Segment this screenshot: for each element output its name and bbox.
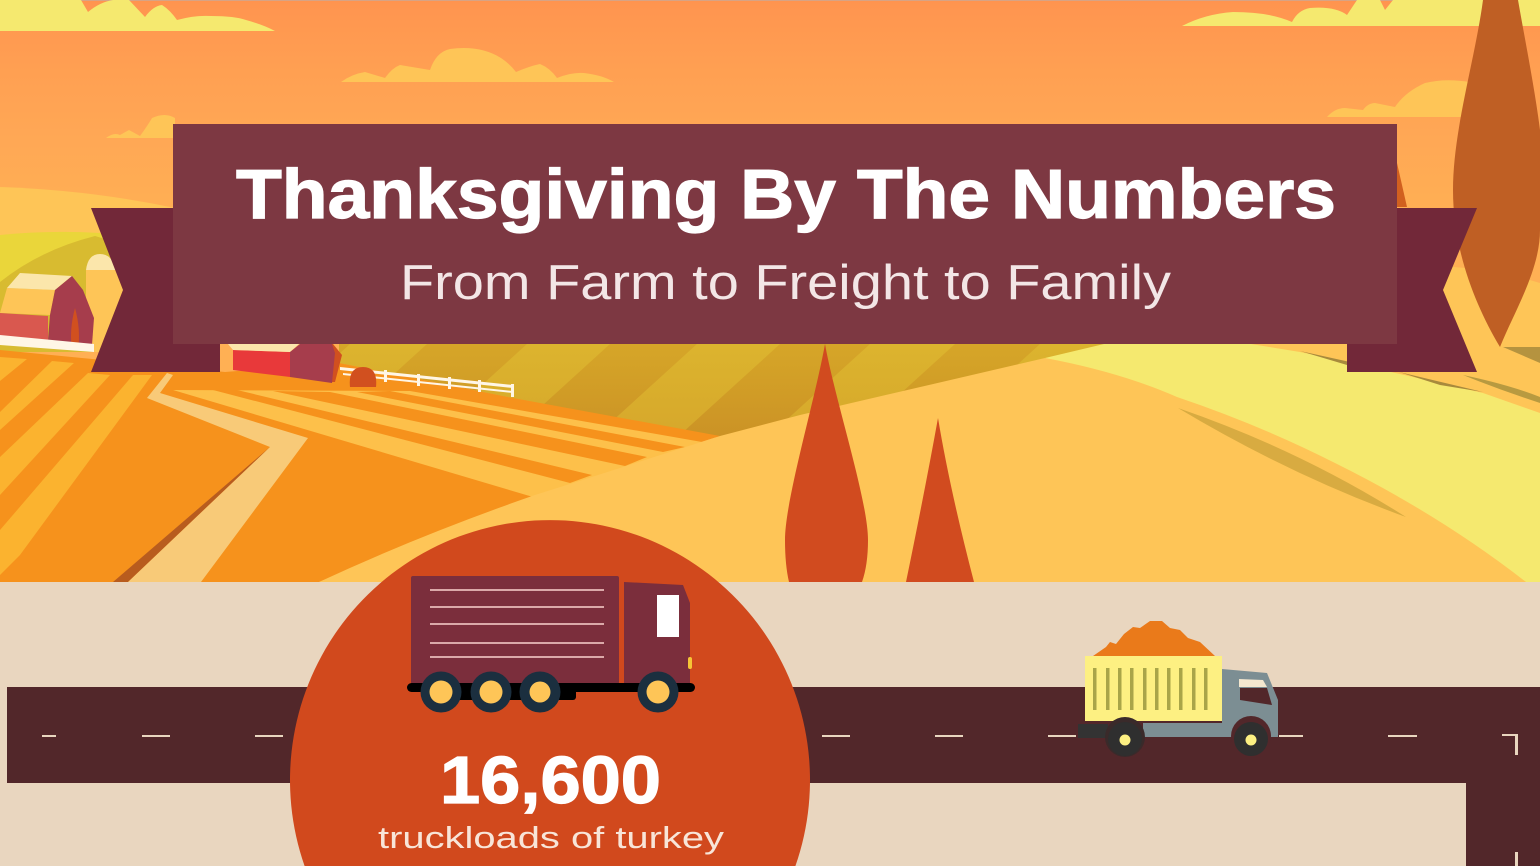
- cloud: centre: [341, 48, 614, 82]
- banner ribbon: right: [1347, 208, 1477, 372]
- cloud: small left: [106, 115, 175, 138]
- icon: grey dump truck: [1078, 621, 1278, 757]
- subtitle: From Farm to Freight to Family: [400, 256, 1172, 310]
- cloud: top left: [0, 0, 275, 31]
- hill: left olive: [0, 236, 125, 352]
- stat label: truckloads of turkey: [378, 820, 725, 855]
- icon: turkey truck: [407, 576, 695, 712]
- barn: red: [228, 344, 342, 383]
- stat number: 16,600: [440, 743, 661, 818]
- cloud: top right: [1182, 0, 1540, 26]
- hill: far left: [0, 187, 175, 350]
- barn: left silo: [86, 254, 125, 352]
- tree: large right: [1453, 0, 1540, 347]
- right field stripes: [173, 390, 702, 497]
- road: [7, 687, 1540, 866]
- road markings: [42, 734, 1518, 866]
- gold crop field: [339, 344, 1104, 437]
- tree: centre tall: [785, 344, 868, 582]
- banner: [173, 124, 1397, 344]
- barn: left: [0, 273, 94, 352]
- farm road: [113, 373, 308, 582]
- hill: left yellow: [0, 232, 125, 352]
- hill streaks: [1178, 347, 1540, 517]
- left field stripes: [0, 357, 152, 575]
- small tree behind banner: [1397, 163, 1407, 207]
- hill: right background: [1200, 266, 1540, 440]
- hill: foreground: [319, 358, 1526, 582]
- cloud: right: [1327, 80, 1470, 117]
- banner ribbon: left: [91, 208, 220, 372]
- sky background: [0, 0, 1540, 582]
- stat circle: [290, 520, 810, 866]
- bush: [350, 367, 376, 387]
- orange farm field: [0, 350, 720, 582]
- fence: [340, 367, 514, 397]
- lower background: [0, 582, 1540, 866]
- hill: yellow: [1045, 344, 1540, 582]
- title: Thanksgiving By The Numbers: [236, 155, 1336, 233]
- tree: centre small: [906, 418, 974, 582]
